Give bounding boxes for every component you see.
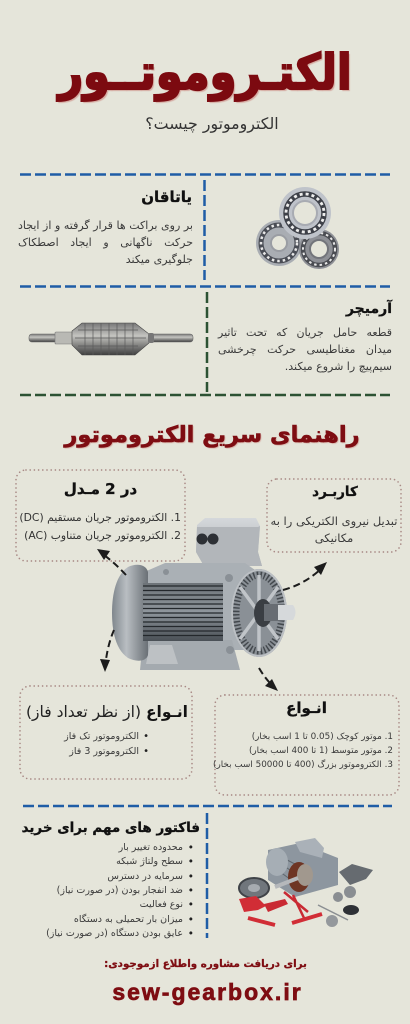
- list: purchase factors: [46, 842, 183, 939]
- footer website: sew-gearbox.ir: [112, 979, 303, 1005]
- panel heading: types by power: انـواع: [286, 699, 327, 717]
- icon: bearings: [256, 187, 339, 269]
- panel list: power classes: 1. موتور کوچک (0.05 تا 1 اسب بخار): [252, 732, 393, 742]
- panel list: two models: 2. الکتروموتور جریان متناوب (AC): [24, 528, 181, 542]
- panel list: power classes: 2. موتور متوسط (1 تا 400 اسب بخار): [249, 746, 393, 756]
- panel list: two models: [19, 511, 181, 542]
- panel heading: types by phase: انـواع (از نظر تعداد فاز): [26, 703, 188, 721]
- panel list: power classes: [213, 732, 393, 770]
- list: purchase factors: میزان بار تحمیلی به دستگاه: [74, 914, 183, 925]
- list: purchase factors: سرمایه در دسترس: [107, 871, 183, 882]
- list bullets: •: [188, 871, 194, 883]
- heading: armature: آرمیچر: [346, 301, 392, 317]
- top section dividers: [20, 173, 390, 396]
- panel bullets: phases: •: [143, 746, 149, 756]
- list bullets: •: [188, 928, 194, 940]
- panel list: phases: الکتروموتور 3 فاز: [69, 746, 139, 756]
- list: purchase factors: عایق بودن دستگاه (در صورت نیاز): [46, 928, 183, 939]
- panel heading: two models: در 2 مـدل: [64, 480, 137, 498]
- panel: types by power: [213, 694, 400, 796]
- illustration: electric motor: [112, 518, 296, 670]
- panel list: phases: [64, 731, 139, 756]
- panel: two models: [15, 469, 186, 562]
- panel list: phases: الکتروموتور تک فاز: [64, 731, 139, 742]
- panel: types by phase: [19, 685, 193, 780]
- panel heading: usage: کاربـرد: [312, 484, 358, 500]
- arrows: motor to panels: [97, 549, 327, 691]
- list bullets: [188, 842, 194, 940]
- panel bullets: phases: •: [143, 731, 149, 742]
- panel: usage: [266, 478, 402, 553]
- text: bearing description: بر روی براکت ها قرار گرفته و از ایجاد حرکت ناگهانی و ایجاد اصطکاک جلوگیری میکند: [18, 219, 193, 266]
- list: purchase factors: ضد انفجار بودن (در صورت نیاز): [57, 885, 183, 896]
- list bullets: •: [188, 885, 194, 897]
- list bullets: •: [188, 856, 194, 868]
- subtitle: الکتروموتور چیست؟: [145, 114, 279, 133]
- panel list: power classes: 3. الکتروموتور بزرگ (400 تا 50000 اسب بخار): [213, 760, 393, 770]
- heading: purchase factors: فاکتور های مهم برای خرید: [22, 820, 200, 836]
- panel text: usage: تبدیل نیروی الکتریکی را به مکانیکی: [271, 514, 397, 545]
- list bullets: •: [188, 914, 194, 926]
- title: الکتـروموتــور: [58, 44, 352, 101]
- heading: bearing: یاتاقان: [141, 188, 192, 206]
- heading: quick guide: راهنمای سریع الکتروموتور: [64, 422, 360, 448]
- panel list: two models: 1. الکتروموتور جریان مستقیم (DC): [19, 511, 181, 524]
- list: purchase factors: سطح ولتاژ شبکه: [116, 856, 183, 867]
- list: purchase factors: نوع فعالیت: [140, 899, 183, 910]
- icon: armature: [28, 322, 194, 356]
- footer prompt: برای دریافت مشاوره واطلاع ازموجودی:: [104, 958, 307, 970]
- illustration: motor parts and tools: [238, 838, 373, 927]
- panel bullets: phases: [143, 731, 149, 756]
- text: armature description: قطعه حامل جریان که تحت تاثیر میدان مغناطیسی حرکت چرخشی سیم‌پیچ را شروع میکند.: [218, 326, 392, 373]
- list bullets: •: [188, 899, 194, 911]
- list bullets: •: [188, 842, 194, 854]
- list: purchase factors: محدوده تغییر بار: [119, 842, 183, 853]
